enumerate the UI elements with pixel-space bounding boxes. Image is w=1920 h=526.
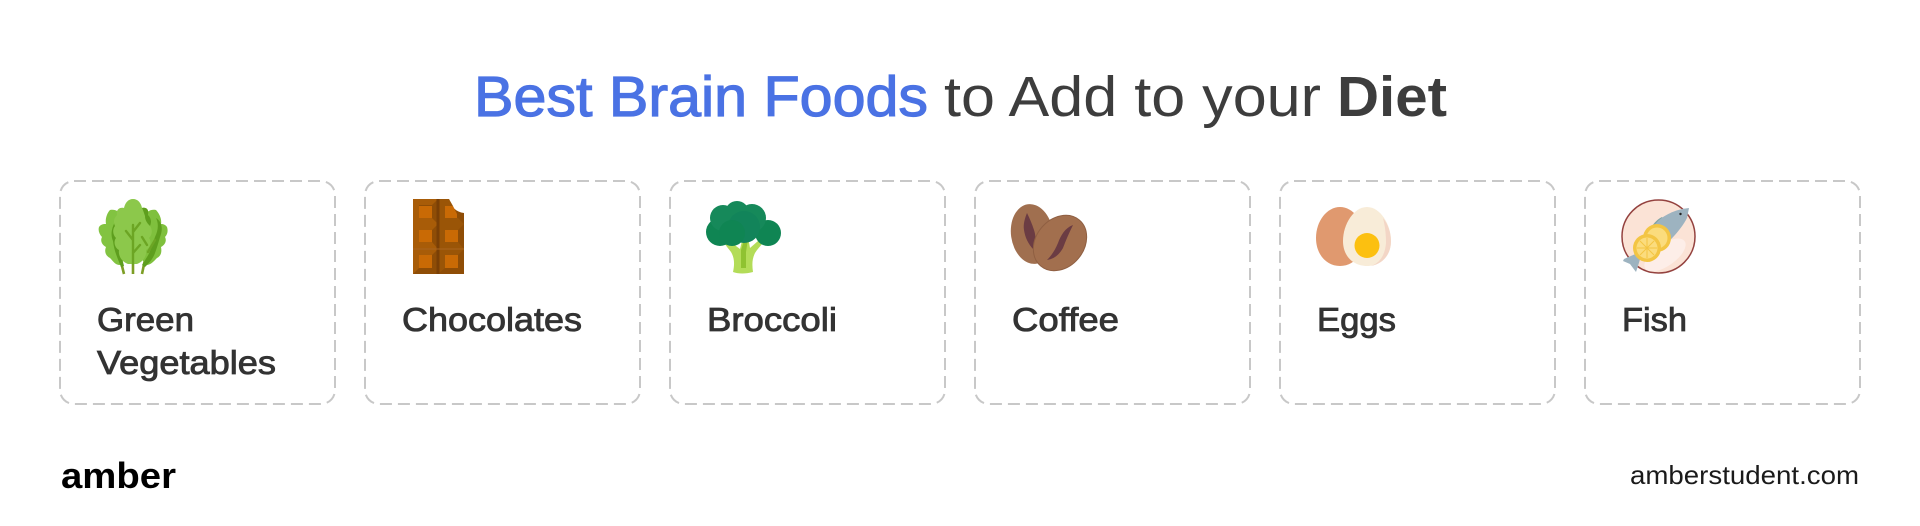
icon: leafy greens: [99, 199, 168, 274]
icon: fish on plate with lemon: [1622, 200, 1695, 278]
label: chocolates: Chocolates: [402, 301, 582, 338]
panel: fish: [1585, 181, 1860, 404]
icon: broccoli: [706, 201, 781, 274]
logo: amber: amber: [61, 455, 176, 496]
panel: green vegetables: [60, 181, 335, 404]
panel: eggs: [1280, 181, 1555, 404]
label: green vegetables: Green: [97, 301, 194, 338]
panel: broccoli: [670, 181, 945, 404]
title: Diet: [1337, 65, 1447, 129]
title: Best Brain Foods: [474, 65, 928, 129]
title: [474, 65, 1447, 129]
label: eggs: Eggs: [1317, 301, 1396, 338]
icon: chocolate bar: [413, 199, 464, 274]
label: green vegetables: [97, 301, 276, 381]
label: broccoli: Broccoli: [707, 301, 837, 338]
website url: amberstudent.com: [1630, 460, 1859, 490]
panel: chocolates: [365, 181, 640, 404]
label: fish: Fish: [1622, 301, 1687, 338]
label: green vegetables: Vegetables: [97, 344, 276, 381]
title: to Add to your: [944, 65, 1321, 129]
icon: coffee beans: [1007, 201, 1098, 281]
panel: coffee: [975, 181, 1250, 404]
icon: eggs: [1316, 207, 1391, 266]
label: coffee: Coffee: [1012, 301, 1119, 338]
